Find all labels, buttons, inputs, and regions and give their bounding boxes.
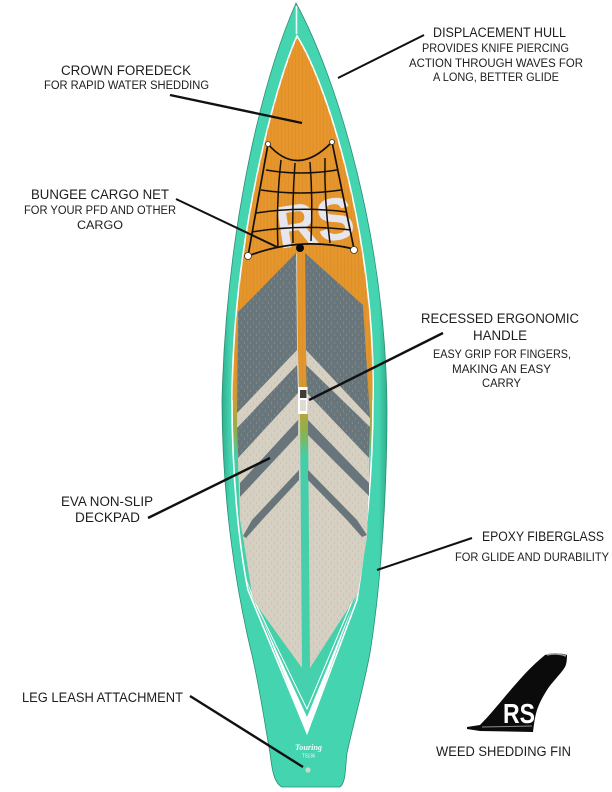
model text (295, 743, 322, 760)
left deck pad (237, 253, 302, 668)
callout: epoxy fiberglass (377, 529, 609, 570)
recessed handle (298, 387, 308, 414)
model text: Touring (295, 743, 322, 752)
callout: epoxy fiberglass: FOR GLIDE AND DURABILITY (455, 552, 609, 564)
callout: recessed ergonomic handle (309, 311, 579, 400)
board hull (222, 3, 387, 787)
callout: bungee cargo net (24, 187, 277, 247)
callout: crown foredeck: CROWN FOREDECK (61, 63, 191, 78)
fin label: WEED SHEDDING FIN (436, 744, 571, 759)
model text: TS136 (302, 754, 315, 760)
callout: recessed ergonomic handle: MAKING AN EASY (452, 364, 551, 376)
net anchor eyelets (244, 140, 358, 260)
callout: EVA deckpad: EVA NON-SLIP (61, 494, 153, 509)
callout: crown foredeck: FOR RAPID WATER SHEDDING (44, 80, 209, 92)
callout: bungee cargo net: FOR YOUR PFD AND OTHER (24, 205, 176, 217)
callout: recessed ergonomic handle: HANDLE (473, 328, 527, 343)
callout: displacement hull: PROVIDES KNIFE PIERCING (422, 43, 569, 55)
callout: recessed ergonomic handle: EASY GRIP FOR FINGERS, (433, 349, 571, 361)
nose centre line (296, 6, 298, 34)
bungee cargo net (244, 140, 358, 260)
leash plug (305, 767, 311, 773)
fin illustration (467, 654, 567, 732)
white tail chevrons (246, 578, 359, 733)
callout: EVA deckpad: DECKPAD (75, 510, 140, 525)
callout: EVA deckpad (61, 458, 270, 525)
callout: displacement hull: ACTION THROUGH WAVES FOR (409, 58, 583, 70)
callout: displacement hull (338, 25, 583, 84)
callout: displacement hull: DISPLACEMENT HULL (433, 25, 566, 40)
callout: recessed ergonomic handle: CARRY (482, 378, 521, 390)
callout: bungee cargo net: CARGO (77, 220, 123, 232)
right deck pad (305, 253, 370, 668)
fin RS logo: RS (503, 698, 535, 729)
callout: displacement hull: A LONG, BETTER GLIDE (433, 72, 559, 84)
wood deck (232, 36, 373, 733)
black deck fitting (296, 244, 304, 252)
callout: crown foredeck (44, 63, 302, 123)
callout: recessed ergonomic handle: RECESSED ERGONOMIC (421, 311, 579, 326)
callout: bungee cargo net: BUNGEE CARGO NET (31, 187, 169, 202)
callout: leg leash attachment: LEG LEASH ATTACHMENT (22, 690, 183, 705)
RS deck logo: RS (271, 183, 359, 262)
callout: leg leash attachment (22, 690, 303, 767)
paddle board (222, 3, 387, 787)
